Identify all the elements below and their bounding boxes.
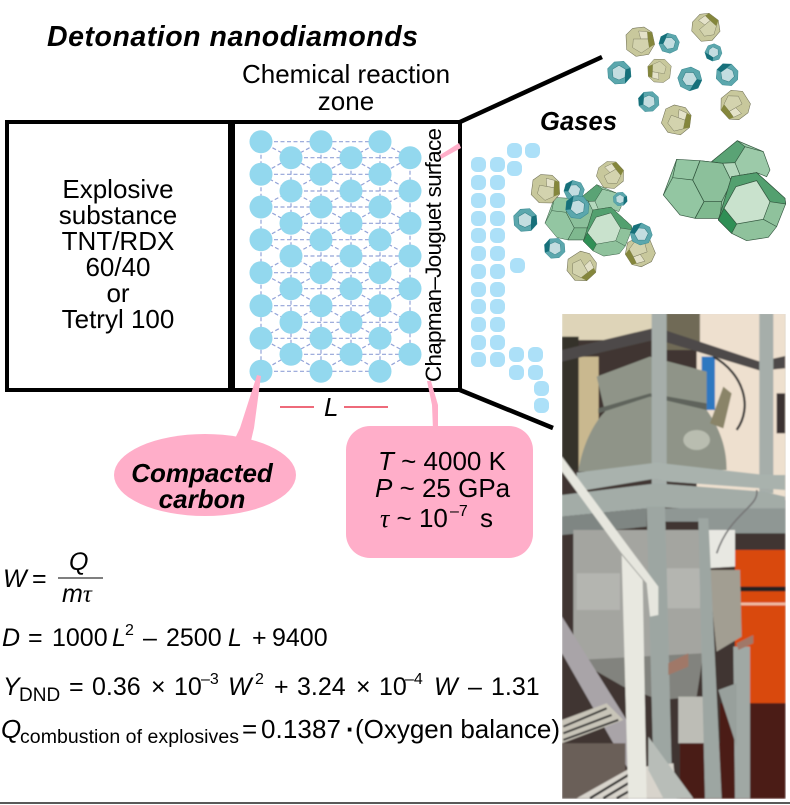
panel: chemical reaction zone lattice [228, 120, 460, 392]
formula: D: – [143, 624, 157, 652]
formula: W: mτ [62, 580, 93, 608]
label: Chapman–Jouguet surface: Chapman–Jouguet surface [421, 128, 446, 382]
panel: explosive substance: or [106, 278, 130, 308]
large green crystal cluster [663, 141, 786, 241]
formula: Y DND: – [468, 673, 482, 701]
formula: Q combustion: · [346, 714, 355, 744]
illustration: nanodiamond polyhedra [514, 8, 786, 287]
formula: Q combustion: combustion of explosives [20, 726, 239, 748]
formula: D: D [2, 624, 20, 652]
panel: explosive substance [7, 122, 231, 390]
formula: Y DND: × [356, 673, 371, 701]
formula: D: 2 [125, 622, 134, 639]
photo: detonation chamber installation [562, 313, 785, 799]
tank dome [578, 357, 727, 472]
formula: Y DND: –3 [201, 671, 219, 688]
formula: Y DND: 3.24 [297, 673, 346, 701]
arrow: pink pointer to Chapman–Jouguet surface [440, 143, 461, 159]
formula: Q combustion: Q [1, 714, 21, 744]
stairs [562, 616, 628, 768]
callout: reaction conditions: P ~ 25 GPa [375, 473, 511, 503]
particles: small carbon droplets [471, 143, 549, 413]
heading: chemical reaction zone: Chemical reaction [242, 59, 450, 89]
heading: chemical reaction zone [242, 59, 450, 116]
formula: Y DND: + [274, 673, 289, 701]
panel: explosive substance: TNT/RDX [62, 226, 174, 256]
formula: W: Q [69, 548, 88, 576]
lower vessel [573, 530, 707, 660]
handrail and white post [562, 457, 658, 617]
heading: chemical reaction zone: zone [318, 86, 374, 116]
formula: Y DND: 1.31 [491, 673, 540, 701]
title: Detonation nanodiamonds [47, 21, 418, 53]
callout: compacted carbon [114, 375, 296, 516]
callout: reaction conditions: s [480, 503, 493, 533]
formula: Q combustion [1, 714, 560, 748]
formula: D: 9400 [272, 624, 328, 652]
formula: Q combustion: (Oxygen balance) [355, 714, 560, 744]
callout: reaction conditions: –7 [450, 503, 468, 520]
dimension label: L [280, 392, 388, 422]
scattered small crystals [608, 8, 754, 139]
formula: D: 1000 [52, 624, 108, 652]
formula: Y DND: W [434, 673, 460, 701]
formula: Y DND: × [151, 673, 166, 701]
formula: Y DND: Y [3, 673, 22, 701]
formula: W: = [32, 565, 47, 593]
callout: compacted carbon: carbon [159, 484, 245, 514]
formula: Q combustion: 0.1387 [261, 714, 341, 744]
formula: Y DND: 10 [379, 673, 407, 701]
formula: Y DND: W [228, 673, 254, 701]
formula: Q combustion: = [242, 714, 257, 744]
orange tiled wall [735, 550, 785, 703]
formula: Y DND: DND [19, 685, 60, 706]
background wall [562, 313, 785, 799]
lines: expansion from reaction zone [460, 57, 602, 428]
posts [647, 507, 672, 767]
formula: Y DND: 2 [255, 671, 264, 688]
formula: Y DND: 0.36 [92, 673, 141, 701]
formula: D: L [112, 624, 126, 652]
panel: explosive substance: Explosive [62, 174, 174, 204]
brackets [668, 653, 688, 675]
formula: W [3, 548, 103, 608]
formula: Y DND: 10 [174, 673, 202, 701]
label: gases: Gases [540, 108, 617, 136]
panel: explosive substance: substance [59, 200, 177, 230]
frame beams [562, 327, 785, 371]
bottom rule [0, 802, 790, 804]
callout: compacted carbon: Compacted [131, 458, 274, 488]
callout: reaction conditions [346, 381, 533, 558]
formula: D: = [28, 624, 43, 652]
panel: explosive substance: 60/40 [85, 252, 151, 282]
dimension label: L: L [324, 392, 338, 422]
formula: Y DND [3, 671, 540, 706]
formula: D: L [228, 624, 242, 652]
panel: explosive substance: Tetryl 100 [62, 304, 174, 334]
formula: D: 2500 [166, 624, 222, 652]
formula: D [2, 622, 328, 652]
formula: D: + [252, 624, 267, 652]
formula: W: W [3, 565, 29, 593]
mixed crystal cluster [514, 157, 658, 287]
control box and panel [707, 530, 735, 568]
callout: reaction conditions: T ~ 4000 K [378, 446, 507, 476]
formula: Y DND: –4 [405, 671, 423, 688]
formula: Y DND: = [69, 673, 84, 701]
callout: reaction conditions: τ ~ 10 [380, 503, 448, 533]
hose and valve [713, 357, 745, 430]
